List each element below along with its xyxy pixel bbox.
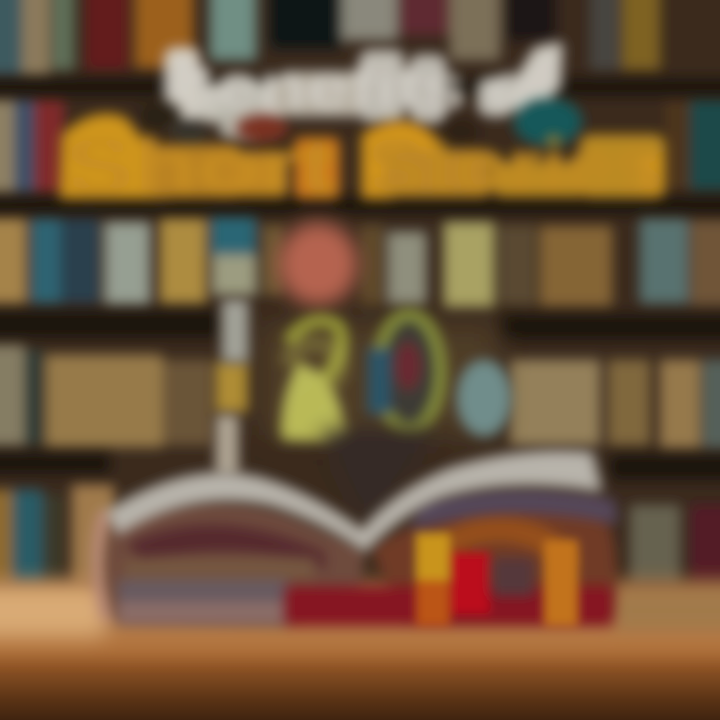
- table top blend: [0, 582, 720, 642]
- book block right: [372, 503, 616, 620]
- bookshelf row 2: [0, 100, 720, 192]
- title line 1: white lettering: Benefits of: [160, 53, 560, 122]
- red bright panel: [450, 552, 490, 614]
- yellow pillar right: [544, 540, 578, 626]
- stacked page edges: [118, 558, 315, 624]
- title line 2: yellow lettering: Stories: [368, 124, 662, 209]
- numeral 0: [368, 314, 441, 430]
- book block left: [104, 502, 365, 625]
- bookshelf row 5: [0, 485, 720, 585]
- dark gap above book: [320, 430, 440, 525]
- title line 1: white lettering: [160, 42, 562, 138]
- title accents: dark and teal: [138, 98, 582, 151]
- numeral 2: 2: [273, 304, 357, 472]
- yellow pillar left: [416, 533, 450, 626]
- right arch: [420, 518, 578, 565]
- bookshelf row 1: [0, 0, 720, 75]
- table edge highlights: [0, 586, 720, 652]
- page shadow left: [128, 524, 325, 570]
- page shadow right: [410, 490, 618, 530]
- red circle: [278, 222, 358, 306]
- bookshelf row 3: [0, 216, 720, 307]
- title line 2: yellow lettering: [60, 114, 665, 209]
- white pages: [106, 451, 602, 552]
- title line 2: yellow lettering: Short: [65, 124, 335, 209]
- left cover edge: [98, 512, 108, 620]
- center backdrop behind numerals: [262, 325, 498, 435]
- red book: [285, 586, 613, 626]
- open book: [98, 451, 618, 626]
- white spine strand: [216, 300, 248, 475]
- dark window: [492, 558, 534, 596]
- table base: [0, 620, 720, 720]
- teal globe: [457, 360, 511, 436]
- shelf planks: [0, 78, 720, 480]
- bookshelf row 4: [0, 345, 720, 448]
